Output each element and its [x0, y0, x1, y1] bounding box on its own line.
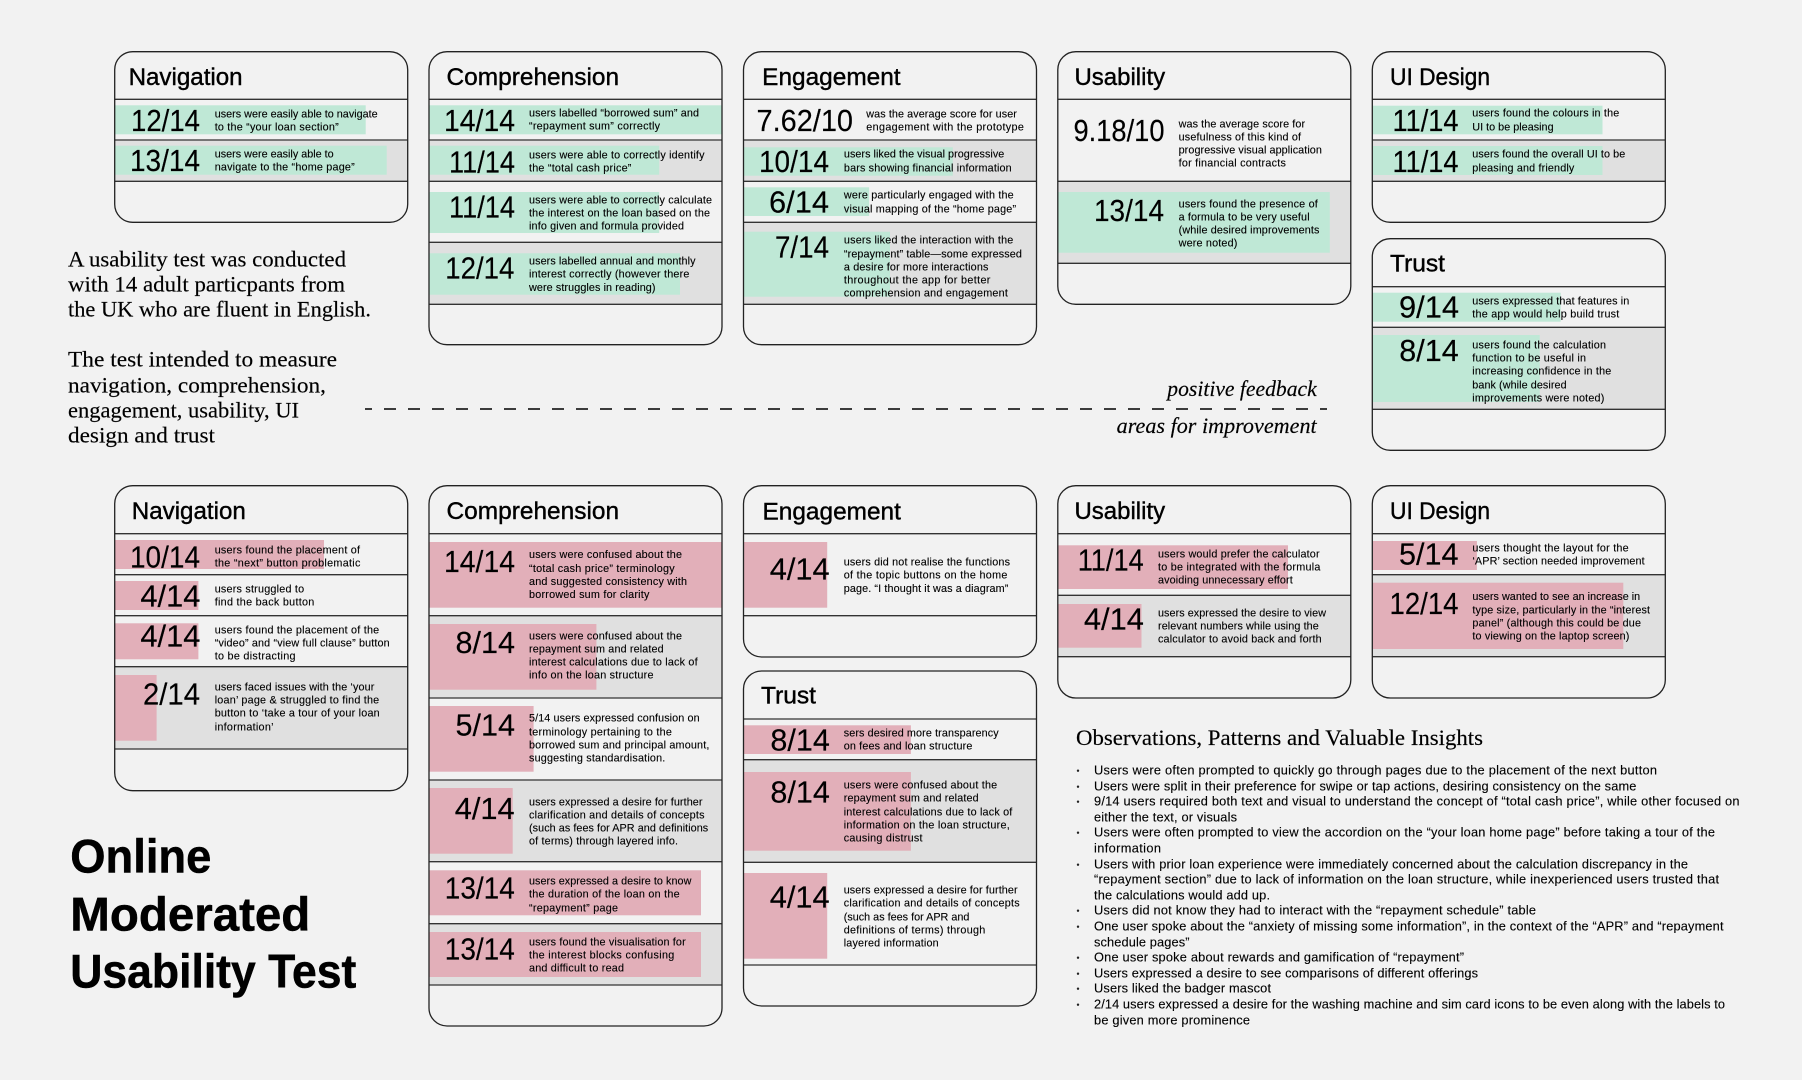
- row: 8/14 causing distrust: causing distrust: [844, 833, 922, 845]
- row: 9.18/10 usefulness score: progressive visual application: [1179, 145, 1322, 157]
- row: 12/14 type size: panel” (although this could be due: [1472, 618, 1641, 630]
- row: 2/14 take a tour: information’: [215, 722, 274, 734]
- row: 13/14 interest blocks: [429, 924, 722, 985]
- row: 4/14 further clarification: (such as fees for APR and: [844, 912, 969, 924]
- row: 4/14 relevant numbers: relevant numbers while using the: [1158, 621, 1319, 633]
- row: 5/14 terminology: borrowed sum and principal amount,: [529, 740, 709, 752]
- row: 14/14 total cash price: borrowed sum for clarity: [529, 589, 650, 601]
- heading: Engagement: [762, 498, 901, 526]
- row: 13/14 formula useful: were noted): [1178, 238, 1237, 250]
- row: 13/14 loan duration: the duration of the loan on the: [529, 889, 680, 901]
- row: 4/14 topic buttons: of the topic buttons on the home: [844, 570, 1007, 582]
- row: 14/14 labelled sums: “repayment sum” correctly: [529, 121, 661, 133]
- card outline: [1058, 52, 1351, 304]
- panel: improvement UI design: [1372, 486, 1665, 698]
- row: 7.62/10 average score: engagement with the prototype: [866, 122, 1024, 134]
- row: 13/14 loan duration: 13/14: [445, 870, 515, 905]
- row: 4/14 video and clause buttons: [115, 618, 390, 663]
- panel: positive usability: [1058, 52, 1351, 304]
- row: 7/14 repayment table: users liked the interaction with the: [844, 235, 1013, 247]
- observations list: either the text, or visuals: [1094, 810, 1237, 825]
- row: 10/14 next button: 10/14: [130, 539, 200, 574]
- heading: Comprehension: [446, 498, 619, 525]
- row: 5/14 APR layout: [1372, 536, 1645, 571]
- row: 9.18/10 usefulness score: [1074, 113, 1322, 170]
- row: 10/14 next button: the “next” button problematic: [215, 558, 361, 570]
- row: 8/14 calculation function: increasing confidence in the: [1472, 366, 1611, 378]
- row: 9/14 features build trust: users expressed that features in: [1472, 295, 1629, 307]
- card outline: [429, 52, 722, 345]
- observations list: information: [1094, 841, 1161, 856]
- row: 4/14 video and clause buttons: to be distracting: [215, 651, 296, 663]
- heading: UI Design: [1390, 498, 1490, 525]
- observations list: be given more prominence: [1094, 1013, 1250, 1028]
- row: 12/14 type size: users wanted to see an increase in: [1472, 591, 1640, 603]
- observations list: Users did not know they had to interact with the “repayment schedule” table: [1094, 903, 1536, 918]
- row: 8/14 causing distrust: 8/14: [770, 774, 830, 810]
- row: 4/14 video and clause buttons: users found the placement of the: [215, 625, 379, 637]
- row: 8/14 transparency: [744, 723, 999, 758]
- row: 11/14 overall UI friendly: users found the overall UI to be: [1472, 148, 1625, 160]
- row: 5/14 terminology: 5/14 users expressed confusion on: [529, 713, 700, 725]
- row: 13/14 loan duration: [429, 870, 701, 915]
- row: 13/14 loan duration: users expressed a desire to know: [529, 876, 692, 888]
- intro text: design and trust: [68, 422, 215, 447]
- row: 6/14 visual mapping: were particularly engaged with the: [843, 190, 1014, 202]
- row: 13/14 interest blocks: and difficult to read: [529, 963, 624, 975]
- observations list: 9/14 users required both text and visual to understand the concept of “total cash price”, while other focused on: [1094, 794, 1740, 809]
- row: 8/14 transparency: sers desired more transparency: [844, 728, 999, 740]
- row: 8/14 calculation function: 8/14: [1399, 333, 1459, 368]
- observations list: the calculations would add up.: [1094, 888, 1270, 903]
- observations list: Users were often prompted to view the accordion on the “your loan home page” before taking a tour of the: [1094, 825, 1715, 840]
- card outline: [1372, 486, 1665, 698]
- row: 8/14 repayment sum: users were confused about the: [529, 631, 682, 643]
- row: 2/14 take a tour: users faced issues with the ‘your: [215, 682, 375, 694]
- observations list: One user spoke about rewards and gamification of “repayment”: [1094, 950, 1464, 965]
- observations list: Users expressed a desire to see comparisons of different offerings: [1094, 966, 1478, 981]
- row: 5/14 terminology: 5/14: [456, 707, 515, 742]
- row: 10/14 progressive bars: users liked the visual progressive: [844, 149, 1004, 161]
- row: 7/14 repayment table: comprehension and engagement: [844, 288, 1008, 300]
- card outline: [1058, 486, 1351, 698]
- row: 5/14 APR layout: ‘APR’ section needed improvement: [1472, 556, 1645, 568]
- row: 4/14 topic buttons: page. “I thought it was a diagram”: [844, 583, 1009, 595]
- row: 11/14 calculate interest: the interest on the loan based on the: [529, 208, 710, 220]
- observations list: Users with prior loan experience were immediately concerned about the calculation discrepancy in the: [1094, 857, 1688, 872]
- panel: improvement usability: [1058, 486, 1351, 698]
- row: 7/14 repayment table: a desire for more interactions: [844, 262, 989, 274]
- row: 12/14 navigate to your loan: to the “your loan section”: [215, 122, 339, 134]
- observations list: 2/14 users expressed a desire for the washing machine and sim card icons to be even along with the labels to: [1094, 997, 1725, 1012]
- row: 11/14 calculator integrated: avoiding unnecessary effort: [1158, 575, 1293, 587]
- row: 8/14 causing distrust: repayment sum and related: [844, 793, 979, 805]
- row: 4/14 further clarification: [429, 780, 722, 862]
- row: 4/14 topic buttons: 4/14: [770, 551, 830, 586]
- observations list: schedule pages”: [1094, 935, 1190, 950]
- row: 10/14 progressive bars: 10/14: [759, 144, 829, 179]
- row: 8/14 calculation function: bank (while desired: [1472, 379, 1567, 391]
- row: 13/14 navigate to home page: [115, 140, 408, 181]
- row: 12/14 navigate to your loan: 12/14: [131, 103, 200, 138]
- row: 8/14 repayment sum: repayment sum and related: [529, 644, 664, 656]
- row: 8/14 causing distrust: [744, 760, 1036, 862]
- row: 2/14 take a tour: 2/14: [143, 677, 200, 712]
- row: 10/14 progressive bars: bars showing financial information: [844, 163, 1012, 175]
- heading: Navigation: [129, 64, 243, 91]
- row: 14/14 labelled sums: users labelled “borrowed sum” and: [529, 108, 699, 120]
- panel: improvement engagement: [744, 486, 1036, 657]
- main title: Usability Test: [70, 946, 356, 999]
- row: 9.18/10 usefulness score: for financial contracts: [1179, 158, 1286, 170]
- row: 13/14 formula useful: (while desired improvements: [1179, 225, 1320, 237]
- row: 4/14 further clarification: (such as fees for APR and definitions: [529, 823, 709, 835]
- heading: UI Design: [1390, 64, 1490, 91]
- card outline: [1372, 52, 1665, 222]
- intro text: engagement, usability, UI: [68, 397, 299, 422]
- panel: positive UI design: [1372, 52, 1665, 222]
- row: 14/14 total cash price: “total cash price” terminology: [529, 563, 675, 575]
- row: 11/14 total cash price: users were able to correctly identify: [529, 150, 705, 162]
- observations list: Users were often prompted to quickly go through pages due to the placement of the next button: [1094, 763, 1657, 778]
- row: 8/14 transparency: on fees and loan structure: [844, 741, 972, 753]
- intro text: the UK who are fluent in English.: [68, 297, 371, 322]
- panel: improvement navigation: [115, 486, 408, 791]
- intro text: navigation, comprehension,: [68, 372, 326, 397]
- panel: positive trust: [1372, 239, 1665, 450]
- intro text: with 14 adult particpants from: [68, 272, 345, 297]
- row: 11/14 overall UI friendly: pleasing and friendly: [1472, 162, 1575, 174]
- row: 13/14 navigate to home page: 13/14: [130, 143, 200, 178]
- row: 4/14 further clarification: [744, 873, 1020, 959]
- row: 14/14 labelled sums: [429, 103, 722, 138]
- row: 11/14 total cash price: 11/14: [449, 144, 515, 179]
- row: 10/14 next button: users found the placement of: [215, 545, 361, 557]
- row: 14/14 labelled sums: 14/14: [444, 103, 515, 138]
- row: 4/14 back button: 4/14: [140, 578, 200, 613]
- observations heading: Observations, Patterns and Valuable Insights: [1076, 725, 1483, 750]
- row: 9/14 features build trust: 9/14: [1399, 290, 1459, 325]
- row: 14/14 total cash price: [429, 542, 722, 608]
- row: 4/14 back button: find the back button: [215, 597, 314, 609]
- observations list: Users liked the badger mascot: [1094, 981, 1271, 996]
- row: 12/14 navigate to your loan: users were easily able to navigate: [215, 109, 378, 121]
- row: 4/14 topic buttons: users did not realise the functions: [844, 557, 1011, 569]
- row: 11/14 calculate interest: [429, 190, 712, 233]
- row: 11/14 colours pleasing: users found the colours in the: [1472, 107, 1619, 119]
- row: 12/14 type size: 12/14: [1390, 586, 1458, 621]
- row: 8/14 repayment sum: [429, 616, 722, 698]
- row: 4/14 further clarification: of terms) through layered info.: [529, 836, 678, 848]
- row: 9.18/10 usefulness score: 9.18/10: [1074, 113, 1164, 148]
- heading: Comprehension: [446, 64, 619, 91]
- row: 2/14 take a tour: loan’ page & struggled to find the: [215, 695, 379, 707]
- main title: Online: [70, 831, 211, 884]
- panel: positive navigation: [115, 52, 408, 222]
- row: 8/14 calculation function: users found the calculation: [1472, 340, 1606, 352]
- card outline: [744, 486, 1036, 657]
- row: 7.62/10 average score: [756, 103, 1024, 138]
- row: 12/14 annual and monthly interest: [429, 242, 722, 304]
- observations list: [1077, 763, 1740, 1028]
- main title: Moderated: [70, 889, 310, 942]
- observations list: One user spoke about the “anxiety of missing some information”, in the context of the “APR” and “repayment: [1094, 919, 1724, 934]
- row: 12/14 annual and monthly interest: interest correctly (however there: [529, 269, 689, 281]
- row: 11/14 total cash price: [429, 140, 722, 181]
- row: 4/14 further clarification: 4/14: [455, 791, 515, 826]
- panel: improvement trust: [744, 671, 1036, 1006]
- row: 11/14 calculator integrated: [1058, 543, 1320, 589]
- row: 13/14 interest blocks: the interest blocks confusing: [529, 950, 674, 962]
- row: 5/14 APR layout: 5/14: [1399, 536, 1458, 571]
- row: 4/14 further clarification: clarification and details of concepts: [529, 810, 705, 822]
- row: 5/14 terminology: terminology pertaining to the: [529, 727, 672, 739]
- row: 10/14 next button: [115, 539, 361, 574]
- row: 8/14 causing distrust: information on the loan structure,: [844, 820, 1010, 832]
- heading: Engagement: [762, 64, 901, 91]
- row: 13/14 interest blocks: users found the visualisation for: [529, 937, 686, 949]
- row: 12/14 navigate to your loan: [115, 103, 378, 138]
- row: 11/14 calculate interest: 11/14: [449, 190, 515, 225]
- row: 8/14 calculation function: [1372, 327, 1665, 409]
- row: 11/14 calculate interest: users were able to correctly calculate: [529, 195, 712, 207]
- panel: positive comprehension: [429, 52, 722, 345]
- row: 2/14 take a tour: [115, 667, 408, 749]
- row: 12/14 type size: [1372, 575, 1665, 657]
- row: 4/14 topic buttons: [744, 542, 1011, 608]
- row: 13/14 navigate to home page: users were easily able to: [215, 149, 334, 161]
- row: 4/14 further clarification: 4/14: [770, 880, 830, 915]
- row: 5/14 terminology: suggesting standardisation.: [529, 753, 665, 765]
- panel: improvement comprehension: [429, 486, 722, 1026]
- row: 4/14 video and clause buttons: “video” and “view full clause” button: [215, 638, 390, 650]
- label: positive feedback: positive feedback: [1165, 376, 1318, 401]
- row: 14/14 total cash price: users were confused about the: [529, 549, 682, 561]
- heading: Trust: [761, 682, 816, 709]
- heading: Usability: [1074, 64, 1165, 91]
- row: 9/14 features build trust: the app would help build trust: [1472, 308, 1619, 320]
- panel: positive engagement: [744, 52, 1036, 345]
- row: 8/14 repayment sum: interest calculations due to lack of: [529, 657, 699, 669]
- row: 13/14 loan duration: “repayment” page: [529, 903, 618, 915]
- row: 12/14 annual and monthly interest: 12/14: [445, 250, 514, 285]
- card outline: [115, 52, 408, 222]
- heading: Navigation: [132, 498, 246, 525]
- heading: Trust: [1390, 251, 1445, 278]
- card outline: [744, 52, 1036, 345]
- row: 8/14 repayment sum: 8/14: [456, 625, 515, 660]
- row: 14/14 total cash price: 14/14: [444, 544, 515, 579]
- row: 6/14 visual mapping: 6/14: [769, 184, 829, 219]
- observations list: Users were split in their preference for swipe or tap actions, desiring consistency on the same: [1094, 779, 1636, 794]
- card outline: [429, 486, 722, 1026]
- row: 4/14 relevant numbers: calculator to avoid back and forth: [1158, 634, 1322, 646]
- row: 4/14 further clarification: layered information: [844, 938, 939, 950]
- row: 4/14 relevant numbers: 4/14: [1084, 602, 1144, 637]
- label: areas for improvement: areas for improvement: [1117, 413, 1318, 438]
- heading: Usability: [1074, 498, 1165, 525]
- row: 11/14 calculate interest: info given and formula provided: [529, 221, 684, 233]
- row: 11/14 overall UI friendly: [1372, 140, 1665, 181]
- row: 14/14 total cash price: and suggested consistency with: [529, 576, 687, 588]
- row: 8/14 causing distrust: users were confused about the: [844, 780, 997, 792]
- row: 12/14 annual and monthly interest: users labelled annual and monthly: [529, 256, 696, 268]
- row: 4/14 relevant numbers: [1058, 595, 1351, 657]
- row: 7/14 repayment table: [744, 222, 1036, 304]
- row: 7.62/10 average score: was the average score for user: [865, 109, 1017, 121]
- card outline: [744, 671, 1036, 1006]
- row: 13/14 formula useful: users found the presence of: [1179, 199, 1319, 211]
- row: 11/14 total cash price: the “total cash price”: [529, 163, 632, 175]
- row: 13/14 formula useful: a formula to be very useful: [1179, 212, 1310, 224]
- main title: [70, 831, 356, 999]
- card outline: [1372, 239, 1665, 450]
- row: 11/14 overall UI friendly: 11/14: [1392, 144, 1458, 179]
- card outline: [115, 486, 408, 791]
- row: 11/14 calculator integrated: users would prefer the calculator: [1158, 549, 1320, 561]
- row: 4/14 further clarification: users expressed a desire for further: [529, 797, 703, 809]
- intro text: The test intended to measure: [68, 347, 337, 372]
- row: 4/14 further clarification: clarification and details of concepts: [844, 898, 1020, 910]
- row: 8/14 calculation function: function to be useful in: [1472, 353, 1586, 365]
- row: 11/14 colours pleasing: UI to be pleasing: [1472, 121, 1554, 133]
- row: 8/14 calculation function: improvements were noted): [1472, 392, 1604, 404]
- row: 7.62/10 average score: 7.62/10: [756, 103, 853, 138]
- row: 13/14 interest blocks: 13/14: [445, 931, 515, 966]
- row: 13/14 formula useful: [1058, 181, 1351, 263]
- row: 5/14 terminology: [429, 706, 709, 772]
- intro text: [68, 247, 371, 447]
- row: 4/14 back button: users struggled to: [215, 584, 304, 596]
- row: 11/14 colours pleasing: 11/14: [1392, 103, 1458, 138]
- row: 6/14 visual mapping: visual mapping of the “home page”: [844, 204, 1016, 216]
- row: 11/14 calculator integrated: 11/14: [1078, 543, 1144, 578]
- row: 13/14 formula useful: 13/14: [1094, 193, 1164, 228]
- row: 9.18/10 usefulness score: usefulness of this kind of: [1179, 132, 1302, 144]
- row: 8/14 repayment sum: info on the loan structure: [529, 670, 654, 682]
- row: 4/14 video and clause buttons: 4/14: [140, 618, 200, 653]
- row: 5/14 APR layout: users thought the layout for the: [1472, 543, 1629, 555]
- row: 4/14 back button: [115, 578, 314, 613]
- row: 7/14 repayment table: 7/14: [775, 230, 829, 265]
- row: 12/14 type size: type size, particularly in the “interest: [1472, 605, 1650, 617]
- observations list: “repayment section” due to lack of information on the loan structure, while inexperienced users trusted that: [1094, 872, 1719, 887]
- row: 6/14 visual mapping: [744, 184, 1016, 219]
- row: 7/14 repayment table: throughout the app for better: [844, 275, 991, 287]
- row: 10/14 progressive bars: [744, 140, 1036, 181]
- row: 4/14 further clarification: definitions of terms) through: [844, 925, 985, 937]
- row: 9.18/10 usefulness score: was the average score for: [1178, 119, 1305, 131]
- row: 2/14 take a tour: button to ‘take a tour of your loan: [215, 708, 380, 720]
- row: 12/14 annual and monthly interest: were struggles in reading): [528, 282, 656, 294]
- row: 7/14 repayment table: “repayment” table—some expressed: [844, 249, 1022, 261]
- row: 13/14 navigate to home page: navigate to the “home page”: [215, 162, 355, 174]
- row: 8/14 causing distrust: interest calculations due to lack of: [844, 807, 1013, 819]
- row: 4/14 relevant numbers: users expressed the desire to view: [1158, 608, 1326, 620]
- row: 11/14 calculator integrated: to be integrated with the formula: [1158, 562, 1320, 574]
- row: 4/14 further clarification: users expressed a desire for further: [844, 885, 1018, 897]
- row: 11/14 colours pleasing: [1372, 103, 1619, 138]
- row: 8/14 transparency: 8/14: [770, 723, 830, 758]
- row: 12/14 type size: to viewing on the laptop screen): [1472, 631, 1629, 643]
- intro text: A usability test was conducted: [68, 247, 346, 272]
- row: 9/14 features build trust: [1372, 290, 1629, 325]
